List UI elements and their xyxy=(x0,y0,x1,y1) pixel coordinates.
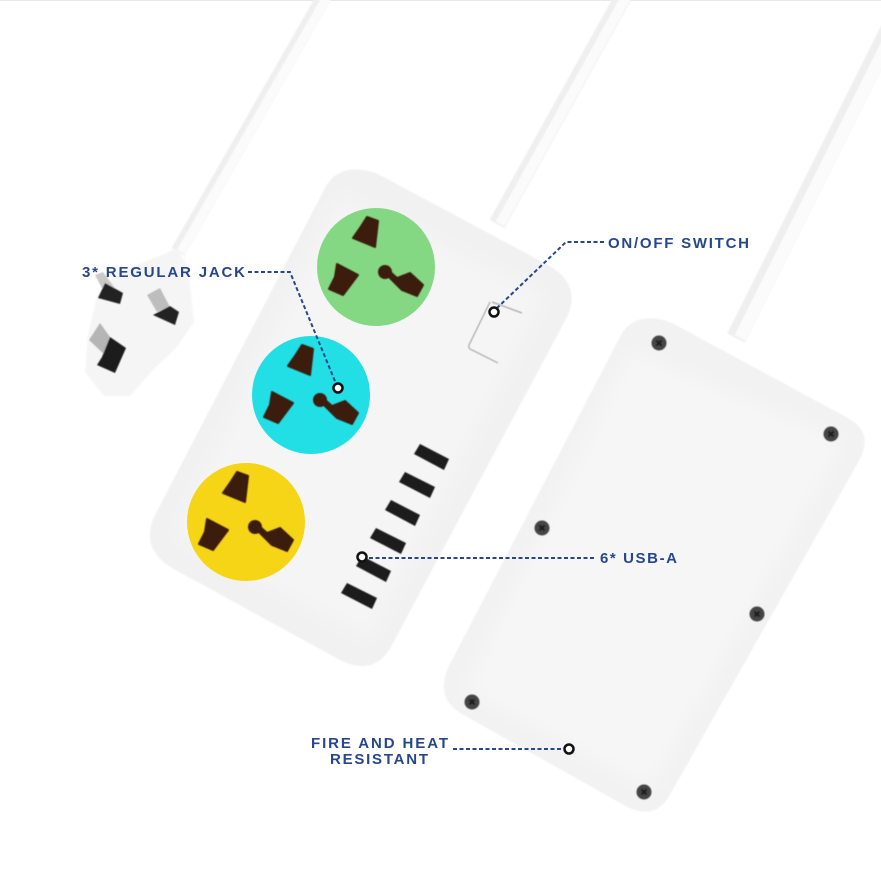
USB-A ports xyxy=(341,444,449,609)
callout: fire and heat resistant xyxy=(311,735,574,768)
screws xyxy=(464,336,838,800)
on/off switch xyxy=(469,302,522,363)
plug pin: top right xyxy=(147,288,179,325)
socket: cyan xyxy=(252,336,370,454)
power cords xyxy=(178,0,881,338)
panel: back of power strip xyxy=(444,318,865,812)
socket: yellow xyxy=(187,463,305,581)
callout: 3x regular jack xyxy=(82,264,342,392)
callout: fire and heat resistant: RESISTANT xyxy=(330,751,428,768)
plug pin: top left xyxy=(95,272,123,304)
plug xyxy=(85,248,194,396)
callout: fire and heat resistant: FIRE AND HEAT xyxy=(311,735,448,752)
plug body xyxy=(85,248,194,396)
callout: on/off switch xyxy=(490,235,749,316)
socket: green xyxy=(317,208,435,326)
callout: 3x regular jack: 3* REGULAR JACK xyxy=(82,264,245,281)
panel: front of power strip xyxy=(150,169,572,666)
callout: on/off switch: ON/OFF SWITCH xyxy=(608,235,749,252)
callout: 6x USB-A: 6* USB-A xyxy=(600,550,677,567)
callout: 6x USB-A xyxy=(358,550,677,567)
plug pin: large xyxy=(89,323,126,373)
